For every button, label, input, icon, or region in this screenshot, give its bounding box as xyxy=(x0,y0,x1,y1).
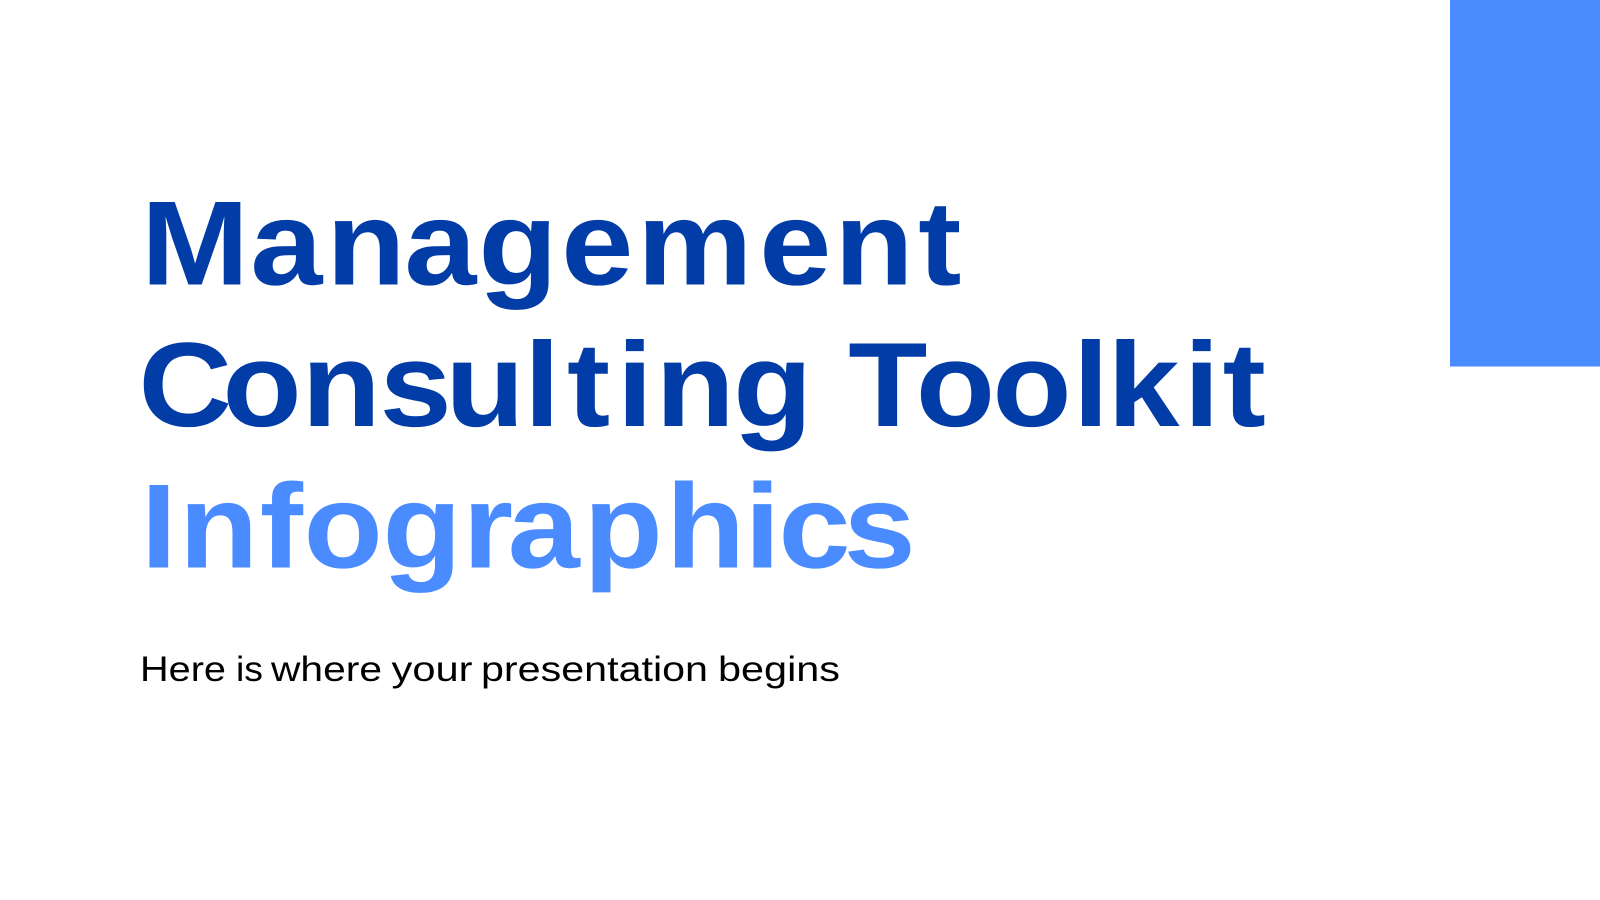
subtitle: begins xyxy=(718,650,840,689)
accent rectangle xyxy=(1450,0,1600,366)
title line: Management: Management xyxy=(141,177,961,310)
subtitle: Here xyxy=(140,650,226,689)
title xyxy=(138,177,1266,593)
subtitle: is xyxy=(236,650,263,689)
title line: Consulting Toolkit: Consulting Toolkit xyxy=(138,318,1266,452)
subtitle: presentation xyxy=(481,650,708,689)
subtitle xyxy=(140,650,840,689)
subtitle: where xyxy=(270,650,382,689)
title line: Infographics: Infographics xyxy=(141,460,916,593)
subtitle: your xyxy=(392,650,473,689)
